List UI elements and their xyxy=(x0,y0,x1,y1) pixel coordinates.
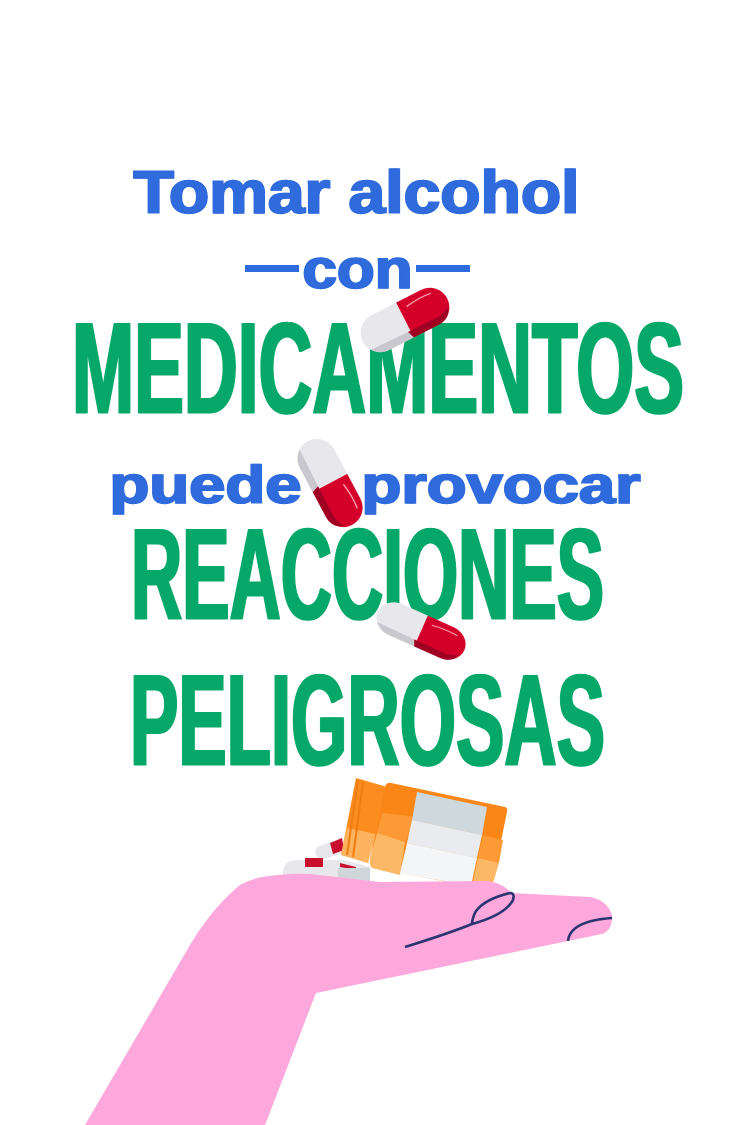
icon: capsule top xyxy=(354,281,456,359)
hand crease lines xyxy=(405,893,612,947)
heading: con: con xyxy=(303,237,413,300)
icon: capsule middle xyxy=(290,432,370,534)
icon: capsule lower xyxy=(371,596,471,666)
heading: puede: puede xyxy=(110,456,302,515)
heading: con xyxy=(245,237,470,300)
icon: orange pill bottle xyxy=(341,778,507,890)
heading: Tomar alcohol: Tomar alcohol xyxy=(134,159,580,226)
icon: spilled pills xyxy=(283,838,370,882)
icon: pink hand xyxy=(85,874,612,1125)
heading: provocar: provocar xyxy=(362,456,641,515)
